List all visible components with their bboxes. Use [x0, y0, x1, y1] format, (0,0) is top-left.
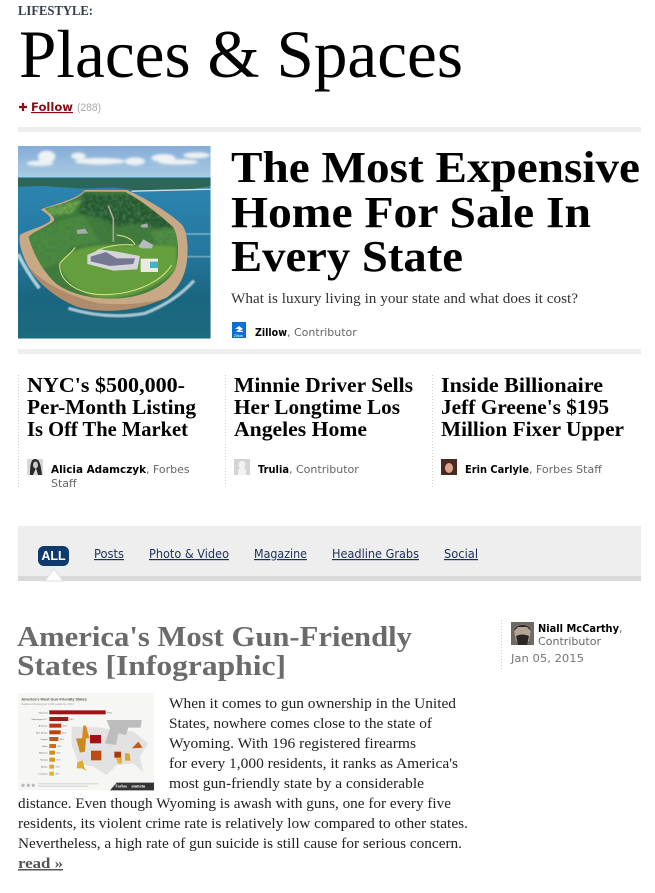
- surf: [18, 234, 211, 316]
- bar chart: 66.9: [70, 719, 75, 721]
- bar chart: 45.0: [62, 732, 67, 734]
- article excerpt: most gun-friendly state by a considerable: [169, 776, 424, 792]
- lawn: [59, 245, 177, 298]
- article excerpt: When it comes to gun ownership in the United: [169, 696, 457, 712]
- panel: story three: [432, 373, 624, 487]
- icon: zillow logo: Zillow: [234, 334, 243, 338]
- active tab: all: [38, 546, 69, 566]
- bar chart: Alaska: [41, 766, 48, 769]
- story headline: Minnie Driver Sells: [234, 373, 413, 397]
- tab links: Magazine: [254, 547, 307, 561]
- story headline: [441, 373, 624, 441]
- article excerpt: distance. Even though Wyoming is awash with guns, one for every five: [18, 796, 451, 812]
- article excerpt: Wyoming. With 196 registered firearms: [169, 736, 416, 752]
- byline: Alicia Adamczyk, Forbes: [51, 463, 190, 476]
- panel: featured story: [18, 143, 640, 339]
- story headline: Inside Billionaire: [441, 373, 603, 397]
- pool terrace: [141, 259, 158, 272]
- bar chart: 34.5: [57, 746, 62, 748]
- tab links: [94, 547, 478, 561]
- chart footer: [21, 783, 154, 790]
- section label: LIFESTYLE:: [18, 3, 93, 18]
- article author: [502, 620, 622, 670]
- active tab: all: ALL: [41, 549, 66, 563]
- icon: zillow logo: [232, 322, 246, 338]
- byline: Erin Carlyle, Forbes Staff: [465, 463, 602, 476]
- article title: [17, 621, 413, 682]
- article title: States [Infographic]: [17, 650, 286, 682]
- panel: filter tabs: [18, 526, 641, 581]
- bar chart: Louisiana: [38, 774, 48, 776]
- infographic thumbnail: [18, 693, 154, 790]
- chart footer: statista: [131, 783, 146, 788]
- story headline: Angeles Home: [234, 417, 367, 441]
- tab links: Headline Grabs: [332, 547, 419, 561]
- bar chart: 19.8: [55, 767, 60, 769]
- byline: Trulia, Contributor: [258, 463, 359, 476]
- follow link: Follow: [31, 100, 73, 114]
- article author: Contributor: [538, 635, 601, 648]
- island rock shore: [20, 190, 188, 311]
- avatar: Niall McCarthy: [511, 622, 534, 645]
- bar chart: Wyoming: [39, 712, 48, 714]
- chart footer: Forbes: [115, 783, 128, 788]
- story headline: Is Off The Market: [27, 417, 188, 441]
- bar chart: Alabama: [39, 752, 48, 755]
- story headline: NYC's $500,000-: [27, 373, 185, 397]
- story headline: Her Longtime Los: [234, 395, 400, 419]
- headline: The Most Expensive: [231, 143, 640, 192]
- panel: story one: Staff: [51, 477, 77, 490]
- headline: Home For Sale In: [231, 188, 591, 237]
- avatar: Erin Carlyle: [441, 459, 457, 475]
- photo: island estate: [18, 146, 211, 339]
- tab links: Posts: [94, 547, 124, 561]
- tab links: Social: [444, 547, 478, 561]
- bar chart: 30.6: [56, 753, 61, 755]
- icon: plus: [19, 103, 27, 111]
- story headline: Per-Month Listing: [27, 395, 196, 419]
- gun silhouette: [105, 720, 142, 745]
- house: [87, 249, 140, 271]
- article excerpt: for every 1,000 residents, it ranks as America's: [169, 756, 458, 772]
- story headline: [27, 373, 196, 441]
- garden paths: [60, 235, 172, 295]
- avatar: placeholder: [234, 459, 250, 475]
- date: Jan 05, 2015: [510, 652, 584, 665]
- bar chart: New Mexico: [36, 732, 48, 734]
- bar chart: 47.6: [63, 726, 68, 728]
- page title: Places & Spaces: [19, 16, 463, 92]
- island vegetation: [28, 192, 178, 299]
- subtitle: What is luxury living in your state and what does it cost?: [231, 291, 578, 307]
- bar chart: Nevada: [40, 760, 48, 762]
- map states: [76, 726, 143, 771]
- story headline: Million Fixer Upper: [441, 417, 624, 441]
- bar chart: [31, 710, 113, 776]
- headline: Every State: [231, 232, 463, 281]
- avatar: Alicia Adamczyk: [27, 459, 43, 475]
- panel: story two: [226, 373, 413, 487]
- article excerpt: States, nowhere comes close to the state of: [169, 716, 432, 732]
- article title: America's Most Gun-Friendly: [17, 621, 413, 653]
- bar chart: 38.1: [60, 739, 65, 741]
- infographic thumbnail: Registered firearms per 1,000 residents in 2014: [21, 703, 74, 706]
- bar chart: 29.5: [56, 760, 61, 762]
- article excerpt: Nevertheless, a high rate of gun suicide is still cause for serious concern.: [18, 836, 462, 852]
- tab links: Photo & Video: [149, 547, 229, 561]
- bar chart: Virginia: [41, 738, 48, 741]
- panel: story one: [18, 373, 196, 490]
- map silhouette: [72, 727, 148, 775]
- headline: [231, 143, 640, 281]
- author name: Niall McCarthy,: [538, 622, 622, 635]
- article excerpt: [18, 696, 468, 852]
- story headline: Jeff Greene's $195: [441, 395, 609, 419]
- article excerpt: residents, its violent crime rate is relatively low compared to other states.: [18, 816, 468, 832]
- follower count: (288): [77, 102, 101, 114]
- read more link: read »: [18, 856, 63, 872]
- story headline: [234, 373, 413, 441]
- bar chart: 196.1: [107, 712, 113, 714]
- follow control: [19, 100, 101, 114]
- bar chart: Washington D.C.: [31, 718, 48, 721]
- bar chart: Arkansas: [39, 725, 48, 728]
- tab pointer: [45, 569, 63, 581]
- bar chart: Idaho: [42, 746, 48, 748]
- bar chart: 18.7: [55, 774, 60, 776]
- byline: Zillow, Contributor: [255, 326, 357, 339]
- thumbnail title: America's Most Gun-Friendly States: [21, 697, 87, 701]
